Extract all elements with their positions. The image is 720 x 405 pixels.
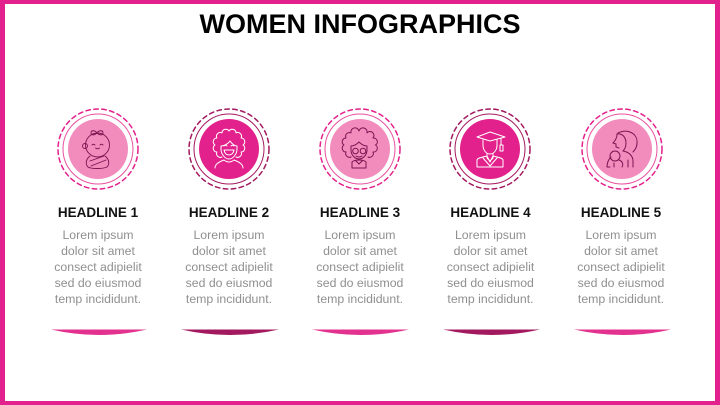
icon: baby bbox=[82, 131, 110, 168]
accent 1 bbox=[51, 330, 147, 335]
column 3 bbox=[316, 204, 404, 306]
icon: grandmother bbox=[342, 128, 377, 168]
column 5 bbox=[577, 204, 665, 306]
body 4: sed do eiusmod bbox=[447, 276, 534, 290]
body 1: Lorem ipsum bbox=[62, 228, 134, 242]
badge 3: grandmother bbox=[320, 109, 400, 189]
badge 5: mother and child bbox=[582, 109, 662, 189]
body 2: sed do eiusmod bbox=[186, 276, 272, 290]
body 5 bbox=[577, 228, 665, 306]
icon: mother and child bbox=[607, 131, 637, 167]
headline 2: HEADLINE 2 bbox=[189, 204, 269, 220]
body 3 bbox=[316, 228, 404, 306]
body 2: temp incididunt. bbox=[186, 292, 272, 306]
body 5: dolor sit amet bbox=[584, 244, 658, 258]
body 2: consect adipielit bbox=[185, 260, 273, 274]
badge 2: curly-haired woman bbox=[189, 109, 269, 189]
accent 2 bbox=[181, 330, 279, 335]
body 3: dolor sit amet bbox=[323, 244, 397, 258]
headline 1: HEADLINE 1 bbox=[58, 204, 138, 220]
column 1 bbox=[54, 204, 142, 306]
body 2: Lorem ipsum bbox=[193, 228, 265, 242]
headline 5: HEADLINE 5 bbox=[581, 204, 661, 220]
accent 4 bbox=[443, 330, 540, 335]
accent 5 bbox=[574, 330, 671, 335]
icon: graduate bbox=[477, 132, 505, 167]
icon: curly-haired woman bbox=[213, 129, 245, 168]
body 2: dolor sit amet bbox=[192, 244, 266, 258]
body 1: consect adipielit bbox=[54, 260, 142, 274]
column 2 bbox=[185, 204, 273, 306]
body 1: temp incididunt. bbox=[55, 292, 141, 306]
body 5: Lorem ipsum bbox=[585, 228, 657, 242]
badge 1: baby bbox=[58, 109, 138, 189]
body 5: temp incididunt. bbox=[578, 292, 664, 306]
body 4 bbox=[447, 228, 534, 306]
badge 4: graduate bbox=[450, 109, 530, 189]
body 4: consect adipielit bbox=[447, 260, 534, 274]
body 4: Lorem ipsum bbox=[455, 228, 526, 242]
body 3: consect adipielit bbox=[316, 260, 404, 274]
headline 3: HEADLINE 3 bbox=[320, 204, 400, 220]
body 5: sed do eiusmod bbox=[578, 276, 664, 290]
body 4: temp incididunt. bbox=[447, 292, 534, 306]
body 5: consect adipielit bbox=[577, 260, 665, 274]
headline 4: HEADLINE 4 bbox=[450, 204, 531, 220]
body 1: dolor sit amet bbox=[61, 244, 135, 258]
column 4 bbox=[447, 204, 534, 306]
accent 3 bbox=[312, 330, 409, 335]
body 1 bbox=[54, 228, 142, 306]
body 4: dolor sit amet bbox=[454, 244, 527, 258]
title: WOMEN INFOGRAPHICS bbox=[200, 9, 520, 39]
body 2 bbox=[185, 228, 273, 306]
body 3: Lorem ipsum bbox=[324, 228, 396, 242]
body 3: sed do eiusmod bbox=[317, 276, 403, 290]
body 3: temp incididunt. bbox=[317, 292, 403, 306]
body 1: sed do eiusmod bbox=[55, 276, 141, 290]
